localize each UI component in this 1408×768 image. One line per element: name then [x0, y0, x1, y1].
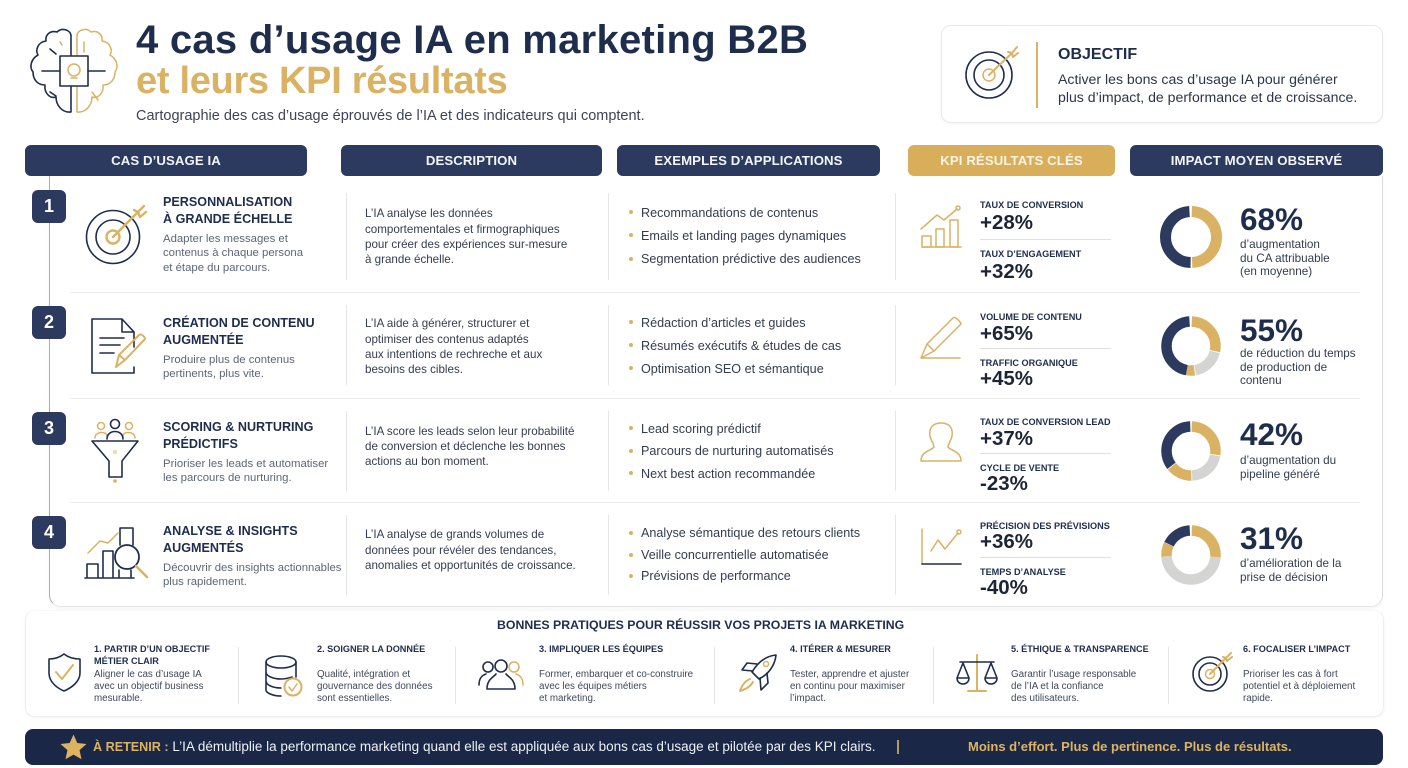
heading: KPI résultats clés — [908, 145, 1115, 176]
description text: L’IA analyse les données — [365, 207, 493, 220]
practice 6: text: potentiel et à déploiement — [1243, 681, 1355, 692]
practice 4: text: l’impact. — [790, 693, 826, 704]
text: takeaway: À RETENIR : L’IA démultiplie la performance marketing quand elle est appliquée aux bons cas d’usage et pilotée par des KPI clairs. — [93, 739, 876, 754]
practice 6: text: Prioriser les cas à fort — [1243, 669, 1338, 680]
practice 4: text: Tester, apprendre et ajuster — [790, 669, 909, 680]
use case title: AUGMENTÉS — [163, 540, 243, 554]
text: objectif — [1058, 71, 1357, 105]
use case title — [163, 420, 313, 450]
KPI icon: growth chart — [920, 205, 962, 248]
use case title — [163, 316, 315, 346]
application examples: Analyse sémantique des retours clients — [641, 526, 860, 540]
impact: donut and figure: 42% — [1240, 416, 1303, 452]
use case summary: Produire plus de contenus — [163, 354, 295, 366]
icon: target — [86, 204, 148, 264]
badge: 2: 2 — [44, 312, 54, 332]
practice 4: text — [790, 644, 915, 706]
badge: 1: 1 — [44, 196, 54, 216]
practice 1: text: avec un objectif business — [94, 681, 203, 692]
description text: données pour révéler des tendances, — [365, 544, 556, 557]
icon: objective target — [965, 46, 1019, 99]
KPI values: TEMPS D’ANALYSE — [980, 567, 1066, 577]
use case summary: et étape du parcours. — [163, 262, 270, 274]
description text: de conversion et déclenche les bonnes — [365, 440, 565, 453]
practice 1: text: mesurable. — [94, 693, 142, 704]
KPI values: CYCLE DE VENTE — [980, 463, 1059, 473]
practice 5: text: Garantir l’usage responsable — [1011, 669, 1136, 680]
application examples: Rédaction d’articles et guides — [641, 316, 806, 330]
application examples — [629, 422, 834, 481]
icon: charts and magnifier — [84, 527, 148, 579]
donut chart: 68% — [1160, 206, 1222, 268]
practice 5: scales icon — [954, 651, 1000, 695]
use case summary — [163, 232, 304, 274]
impact: donut and figure: (en moyenne) — [1240, 265, 1312, 278]
application examples — [629, 316, 841, 376]
badge: 4 — [32, 516, 66, 549]
row 4: analyse et insights — [32, 515, 1342, 599]
text: gold tagline: Moins d’effort. Plus de pertinence. Plus de résultats. — [968, 739, 1292, 754]
description text: actions au bon moment. — [365, 455, 489, 468]
application examples: Emails et landing pages dynamiques — [641, 229, 846, 243]
heading: cas d'usage IA — [25, 145, 307, 176]
description text: optimiser des contenus adaptés — [365, 333, 529, 346]
application examples: Optimisation SEO et sémantique — [641, 362, 824, 376]
practice 5: text: 5. ÉTHIQUE & TRANSPARENCE — [1011, 644, 1149, 654]
KPI icon: user — [920, 422, 962, 462]
donut chart: 42% — [1161, 421, 1221, 481]
description text: L’IA analyse de grands volumes de — [365, 528, 544, 541]
heading: impact moyen observé — [1130, 145, 1383, 176]
practice 1: text: 1. PARTIR D’UN OBJECTIF — [94, 644, 210, 654]
description text: L’IA score les leads selon leur probabilité — [365, 425, 574, 438]
use case summary: Prioriser les leads et automatiser — [163, 458, 328, 470]
KPI values — [980, 312, 1111, 390]
description text — [365, 207, 567, 266]
practice 2: text — [317, 644, 442, 706]
heading: bonnes pratiques: BONNES PRATIQUES POUR RÉUSSIR VOS PROJETS IA MARKETING — [497, 618, 904, 632]
badge: 3: 3 — [44, 418, 54, 438]
practice 1: text: Aligner le cas d’usage IA — [94, 669, 202, 680]
practice 1: shield icon — [46, 651, 82, 695]
heading: exemples d'applications: EXEMPLES D’APPLICATIONS — [654, 153, 843, 168]
text: objectif: Activer les bons cas d’usage IA pour générer — [1058, 71, 1338, 87]
description text — [365, 425, 574, 468]
practice 3: team icon — [476, 656, 526, 692]
text: objectif: plus d’impact, de performance et de croissance. — [1058, 88, 1357, 104]
KPI values: +65% — [980, 322, 1033, 345]
description text: L’IA aide à générer, structurer et — [365, 317, 529, 330]
KPI values: +37% — [980, 427, 1033, 450]
KPI values: VOLUME DE CONTENU — [980, 312, 1082, 322]
practice 3: text: avec les équipes métiers — [539, 681, 647, 692]
practice 4: text: en continu pour maximiser — [790, 681, 905, 692]
practice 6: text: 6. FOCALISER L’IMPACT — [1243, 644, 1350, 654]
impact: donut and figure: de réduction du temps — [1240, 347, 1356, 360]
KPI values — [980, 504, 1115, 607]
use case summary: plus rapidement. — [163, 576, 247, 588]
use case summary: pertinents, plus vite. — [163, 368, 264, 380]
description text — [365, 528, 576, 572]
impact: donut and figure: pipeline généré — [1240, 468, 1320, 481]
row 3: scoring et nurturing — [32, 411, 1360, 503]
description text — [365, 317, 542, 376]
practice 1: text: MÉTIER CLAIR — [94, 656, 159, 666]
title: gold line: et leurs KPI résultats — [136, 60, 507, 102]
description text: à grande échelle. — [365, 253, 454, 266]
heading: cas d'usage IA: CAS D’USAGE IA — [111, 153, 221, 168]
practice 2: text: gouvernance des données — [317, 681, 432, 692]
KPI values: +32% — [980, 260, 1033, 283]
use case title: PERSONNALISATION — [163, 194, 292, 208]
description text: comportementales et firmographiques — [365, 223, 560, 236]
use case summary — [163, 354, 295, 380]
KPI values: TAUX DE CONVERSION — [980, 200, 1083, 210]
impact: donut and figure: d’amélioration de la — [1240, 557, 1341, 570]
icon: document and pencil — [91, 318, 146, 374]
badge: 3 — [32, 412, 66, 445]
KPI values: -23% — [980, 472, 1028, 495]
application examples: Parcours de nurturing automatisés — [641, 444, 834, 458]
heading: description — [341, 145, 602, 176]
donut chart: 55% — [1161, 316, 1221, 376]
impact: donut and figure: contenu — [1240, 374, 1282, 387]
impact: donut and figure: 68% — [1240, 201, 1303, 237]
application examples: Résumés exécutifs & études de cas — [641, 338, 841, 352]
application examples: Prévisions de performance — [641, 569, 791, 583]
impact: donut and figure — [1161, 312, 1356, 387]
use case title: À GRANDE ÉCHELLE — [163, 212, 292, 226]
panel: main table frame — [49, 176, 1383, 607]
description text: aux intentions de rechreche et aux — [365, 348, 542, 361]
panel: objectif — [941, 25, 1383, 123]
icon: lead funnel — [91, 418, 139, 483]
KPI values: PRÉCISION DES PRÉVISIONS — [980, 521, 1110, 531]
impact: donut and figure: d’augmentation — [1240, 238, 1320, 251]
impact: donut and figure — [1161, 416, 1336, 481]
use case summary: Adapter les messages et — [163, 232, 288, 244]
badge: 1 — [32, 190, 66, 223]
use case title: AUGMENTÉE — [163, 332, 243, 346]
practice 5: text: des utilisateurs. — [1011, 693, 1079, 704]
description text: anomalies et opportunités de croissance. — [365, 559, 576, 572]
use case summary: les parcours de nurturing. — [163, 472, 292, 484]
divider: gold rule — [1036, 42, 1038, 108]
heading: description: DESCRIPTION — [426, 153, 517, 168]
heading: exemples d'applications — [617, 145, 880, 176]
practice 2: text: sont essentielles. — [317, 693, 392, 704]
icon: brain circuit logo — [30, 28, 118, 113]
row 1: personnalisation — [32, 190, 1360, 293]
description text: besoins des cibles. — [365, 363, 463, 376]
use case summary — [163, 458, 328, 484]
description text: pour créer des expériences sur-mesure — [365, 238, 567, 251]
impact: donut and figure: prise de décision — [1240, 571, 1328, 584]
practice 3: text: et marketing. — [539, 693, 596, 704]
KPI values: +36% — [980, 530, 1033, 553]
badge: 4: 4 — [44, 522, 54, 542]
impact: donut and figure — [1160, 201, 1330, 278]
practice 2: database icon — [262, 651, 304, 699]
KPI values: +28% — [980, 211, 1033, 234]
heading: KPI résultats clés: KPI RÉSULTATS CLÉS — [940, 153, 1083, 168]
use case summary: contenus à chaque persona — [163, 247, 303, 259]
practice 6: text — [1243, 644, 1368, 706]
impact: donut and figure: de production de — [1240, 361, 1327, 374]
badge: 2 — [32, 306, 66, 339]
donut chart: 31% — [1159, 523, 1223, 587]
impact: donut and figure: du CA attribuable — [1240, 252, 1330, 265]
practice 5: text — [1011, 644, 1156, 706]
practice 4: rocket icon — [736, 651, 780, 695]
KPI values: TRAFFIC ORGANIQUE — [980, 358, 1078, 368]
impact: donut and figure: 31% — [1240, 520, 1303, 556]
icon: star — [60, 734, 87, 760]
application examples — [629, 206, 861, 266]
KPI values: -40% — [980, 576, 1028, 599]
KPI icon: pencil — [920, 316, 962, 359]
use case title — [163, 194, 292, 226]
practice 2: text: Qualité, intégration et — [317, 669, 410, 680]
use case summary: Découvrir des insights actionnables — [163, 562, 341, 574]
banner: à retenir — [25, 729, 1383, 765]
application examples: Veille concurrentielle automatisée — [641, 548, 829, 562]
heading: objectif: OBJECTIF — [1058, 46, 1137, 63]
KPI values: +45% — [980, 367, 1033, 390]
application examples — [629, 526, 860, 583]
divider: gold bar — [897, 740, 898, 754]
practice 3: text: Former, embarquer et co-construire — [539, 669, 693, 680]
practice 6: target icon — [1190, 651, 1234, 695]
practice 3: text: 3. IMPLIQUER LES ÉQUIPES — [539, 644, 663, 654]
application examples: Lead scoring prédictif — [641, 422, 761, 436]
use case title: PRÉDICTIFS — [163, 436, 238, 450]
practice 5: text: de l’IA et la confiance — [1011, 681, 1104, 692]
KPI values: TAUX DE CONVERSION LEAD — [980, 417, 1111, 427]
heading: impact moyen observé: IMPACT MOYEN OBSERVÉ — [1171, 153, 1342, 168]
use case title — [163, 524, 298, 554]
impact: donut and figure: 55% — [1240, 312, 1303, 348]
use case title: ANALYSE & INSIGHTS — [163, 524, 298, 538]
practice 6: text: rapide. — [1243, 693, 1273, 704]
KPI values — [980, 200, 1111, 283]
practice 1: text — [94, 644, 224, 706]
panel: bonnes pratiques — [25, 610, 1384, 717]
application examples: Next best action recommandée — [641, 467, 815, 481]
use case summary — [163, 562, 341, 588]
title: 4 cas d’usage IA en marketing B2B — [136, 18, 808, 62]
impact: donut and figure — [1155, 504, 1375, 604]
subtitle: Cartographie des cas d’usage éprouvés de l’IA et des indicateurs qui comptent. — [136, 108, 645, 124]
use case title: SCORING & NURTURING — [163, 420, 313, 434]
application examples: Segmentation prédictive des audiences — [641, 252, 861, 266]
KPI values — [980, 417, 1111, 495]
KPI values: TAUX D’ENGAGEMENT — [980, 249, 1081, 259]
practice 2: text: 2. SOIGNER LA DONNÉE — [317, 644, 425, 654]
impact: donut and figure: d’augmentation du — [1240, 454, 1336, 467]
use case title: CRÉATION DE CONTENU — [163, 316, 315, 330]
practice 4: text: 4. ITÉRER & MESURER — [790, 644, 891, 654]
row 2: création de contenu — [32, 305, 1360, 399]
practice 3: text — [539, 644, 704, 706]
KPI icon: line chart — [921, 528, 962, 565]
application examples: Recommandations de contenus — [641, 206, 818, 220]
